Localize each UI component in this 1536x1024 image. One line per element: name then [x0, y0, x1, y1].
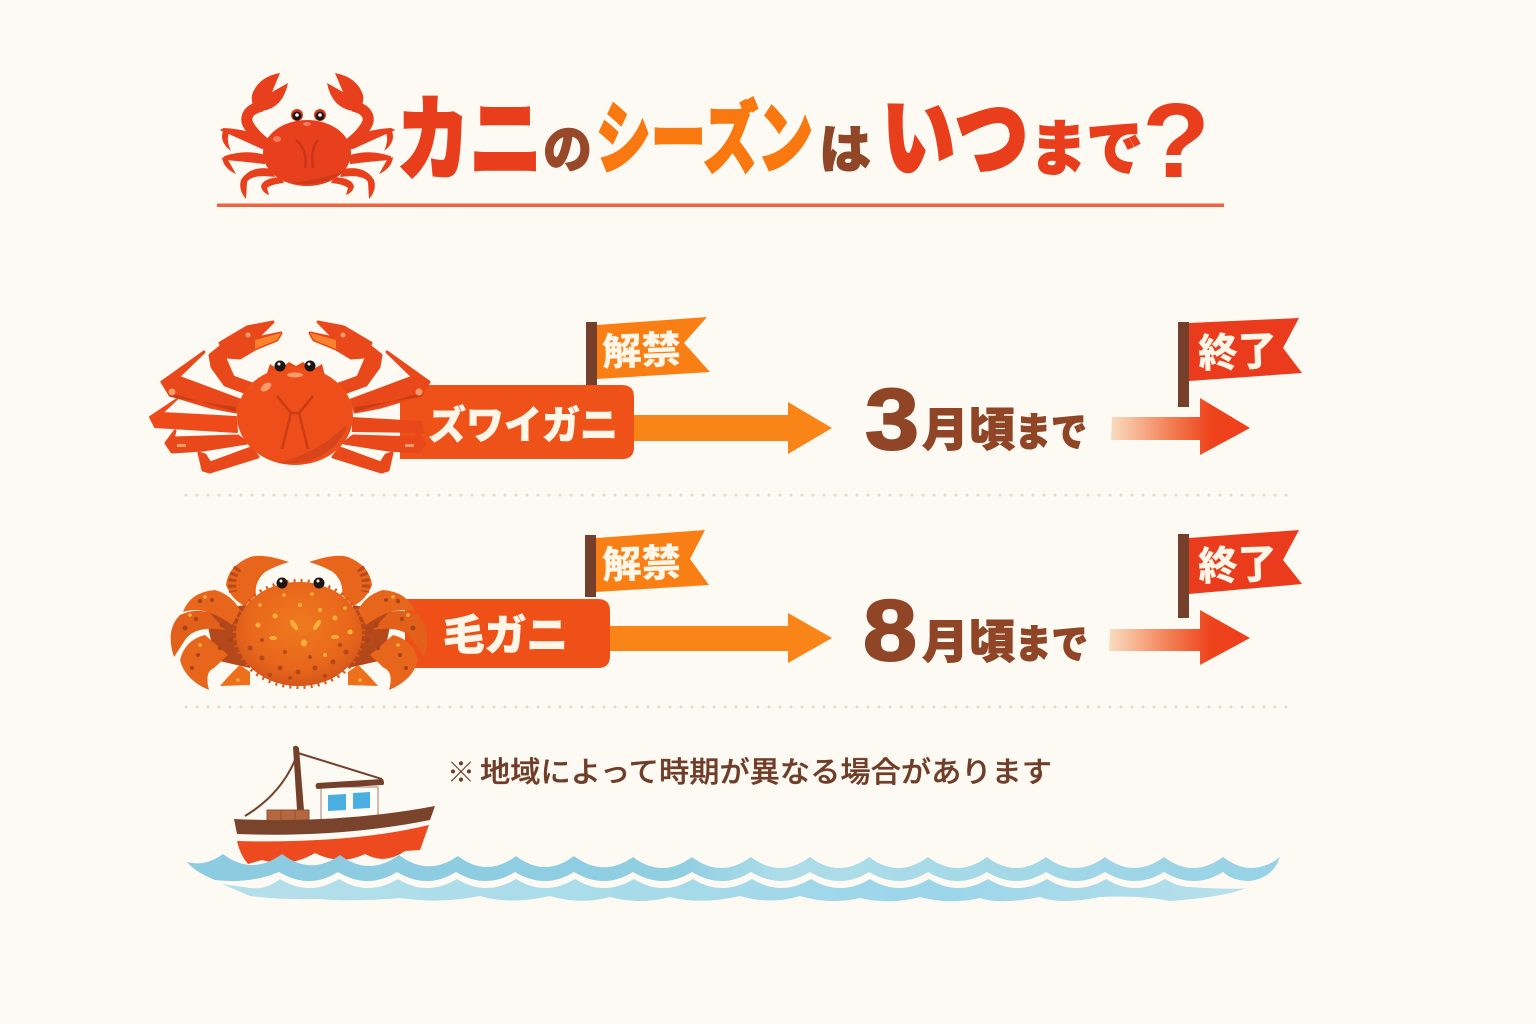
title [397, 82, 1210, 200]
period: 3月頃まで: 月頃 [922, 404, 1015, 456]
period: 3月頃まで [865, 372, 1087, 468]
flag: 終了 [1178, 318, 1302, 407]
note text: 地域によって時期が異なる場合があります [480, 756, 1052, 789]
period: 8月頃まで: 8 [863, 583, 917, 679]
left middle leg [150, 399, 237, 432]
period: 8月頃まで: まで [1015, 623, 1088, 667]
note text: ※ [447, 757, 475, 788]
name label: ズワイガニ: ズワイガニ [428, 404, 618, 448]
flag: 終了: 終了 [1197, 330, 1278, 376]
period: 8月頃まで [863, 583, 1088, 679]
period: 3月頃まで: 3 [865, 372, 919, 468]
title: は [819, 122, 871, 180]
flag: 解禁 [585, 530, 709, 597]
title: カニ [397, 90, 542, 192]
title: シーズン [596, 95, 813, 183]
period: 3月頃まで: まで [1015, 411, 1087, 455]
name label: 毛ガニ: 毛ガニ [443, 612, 568, 659]
icon: hairy crab [171, 556, 427, 690]
title underline [217, 204, 1224, 207]
title: まで [1030, 116, 1143, 183]
arrow: season end, snow crab [1111, 398, 1250, 455]
title: ? [1142, 82, 1210, 200]
flag: 終了: 終了 [1197, 543, 1278, 589]
icon: fishing boat [234, 746, 435, 864]
row 1: snow crab [150, 317, 1302, 472]
arrow: season start, snow crab [632, 402, 832, 454]
waves [187, 854, 1280, 901]
right middle leg [352, 417, 425, 433]
title: いつ [882, 89, 1028, 188]
name label: ズワイガニ [400, 385, 634, 459]
flag: 解禁: 解禁 [601, 543, 682, 587]
period: 8月頃まで: 月頃 [922, 616, 1015, 668]
flag: 解禁: 解禁 [601, 330, 682, 374]
title: の [543, 122, 592, 180]
arrow: season end, hairy crab [1109, 610, 1250, 665]
title crab icon [222, 73, 393, 199]
arrow: season start, hairy crab [608, 613, 832, 663]
name label: 毛ガニ [405, 599, 610, 668]
icon: snow crab [150, 322, 429, 472]
row 2: hairy crab [171, 530, 1302, 690]
flag: 終了 [1178, 530, 1302, 618]
flag: 解禁 [586, 317, 710, 385]
